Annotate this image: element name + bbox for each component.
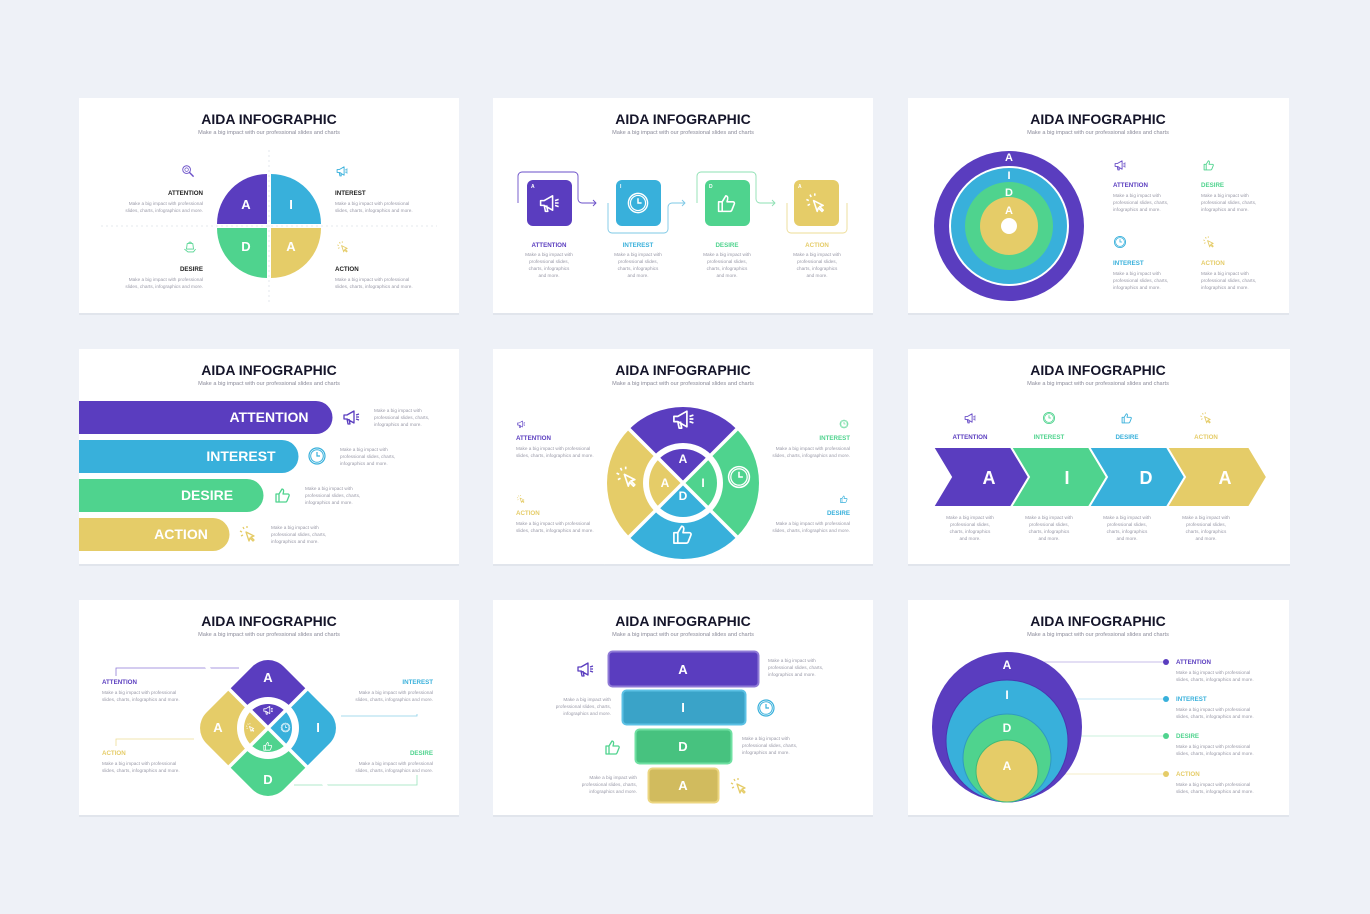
- step: interest: professional slides,: [618, 259, 658, 264]
- icon: desire: [184, 242, 196, 252]
- frames and arrows: [518, 172, 847, 233]
- label: interest: [355, 679, 433, 702]
- circle chart: I: [701, 476, 705, 490]
- bar: D desire: [606, 730, 797, 764]
- chevron: action: [1167, 412, 1267, 541]
- bar: action: professional slides, charts,: [271, 532, 326, 537]
- bar: D desire: D: [678, 739, 688, 754]
- chevron: interest: charts, infographics: [1029, 529, 1070, 534]
- label: interest: slides, charts, infographics and more.: [335, 208, 413, 213]
- label: action: [1201, 236, 1256, 290]
- label: desire: [355, 750, 433, 773]
- label: desire: infographics and more.: [1201, 207, 1249, 212]
- step: desire: Make a big impact with: [703, 252, 751, 257]
- label: desire: DESIRE: [1176, 733, 1199, 740]
- bar: A action: professional slides, charts,: [582, 782, 637, 787]
- label: action: slides, charts, infographics and more.: [516, 528, 594, 533]
- label: interest: Make a big impact with professional: [359, 690, 433, 695]
- circle chart: [607, 407, 759, 559]
- subtitle: Make a big impact with our professional slides and charts: [198, 632, 340, 638]
- label: desire: slides, charts, infographics and more.: [125, 284, 203, 289]
- bar: I interest: Make a big impact with: [563, 697, 611, 702]
- label: desire: professional slides, charts,: [1201, 200, 1256, 205]
- label: attention: [102, 679, 180, 702]
- chevron: action: professional slides,: [1186, 522, 1226, 527]
- step: attention: Make a big impact with: [525, 252, 573, 257]
- chevron: action: Make a big impact with: [1182, 515, 1230, 520]
- chevron: action: and more.: [1195, 536, 1217, 541]
- step: interest: INTEREST: [623, 242, 654, 249]
- label: interest: Make a big impact with: [1113, 271, 1161, 276]
- target chart: A: [1005, 205, 1013, 217]
- chevron: desire: D: [1140, 468, 1152, 488]
- target chart: [934, 151, 1084, 301]
- title: AIDA INFOGRAPHIC: [615, 613, 751, 629]
- label: interest: [1113, 236, 1168, 290]
- slide 9: nested circles: [908, 600, 1289, 817]
- chevron: attention: and more.: [959, 536, 981, 541]
- slide 1: quadrant circle: [79, 98, 459, 315]
- label: attention: [516, 421, 594, 458]
- label: attention: slides, charts, infographics and more.: [102, 697, 180, 702]
- label: interest: slides, charts, infographics and more.: [355, 697, 433, 702]
- label: desire: Make a big impact with professional: [1176, 744, 1250, 749]
- chevron: desire: Make a big impact with: [1103, 515, 1151, 520]
- label: action: Make a big impact with professional: [516, 521, 590, 526]
- diamond chart: A: [263, 670, 273, 685]
- label: desire: slides, charts, infographics and more.: [355, 768, 433, 773]
- bar: I interest: professional slides, charts,: [556, 704, 611, 709]
- title: AIDA INFOGRAPHIC: [1030, 613, 1166, 629]
- nested circle chart: D: [1003, 721, 1012, 735]
- label: desire: DESIRE: [827, 510, 850, 517]
- step: desire: and more.: [716, 273, 738, 278]
- bar: A attention: infographics and more.: [768, 672, 816, 677]
- label: desire: DESIRE: [180, 266, 203, 273]
- label: interest: [772, 420, 850, 458]
- bar: A attention: [578, 652, 823, 686]
- bar: desire: [79, 479, 360, 512]
- label: action: ACTION: [1201, 260, 1225, 267]
- label: attention: Make a big impact with professional: [102, 690, 176, 695]
- quadrant chart: I: [289, 197, 293, 212]
- label: desire: slides, charts, infographics and more.: [1176, 751, 1254, 756]
- slide 3: concentric target: [908, 98, 1289, 315]
- label: interest: INTEREST: [402, 679, 433, 686]
- chevron: desire: and more.: [1116, 536, 1138, 541]
- circle chart: D: [679, 489, 688, 503]
- bar: desire: professional slides, charts,: [305, 493, 360, 498]
- label: action: slides, charts, infographics and more.: [102, 768, 180, 773]
- bar: attention: professional slides, charts,: [374, 415, 429, 420]
- label: action: professional slides, charts,: [1201, 278, 1256, 283]
- label: desire: [772, 496, 850, 533]
- chevron: interest: Make a big impact with: [1025, 515, 1073, 520]
- step: interest: [614, 180, 662, 278]
- label: action: [335, 266, 413, 289]
- title: AIDA INFOGRAPHIC: [1030, 362, 1166, 378]
- step: action: and more.: [806, 273, 828, 278]
- label: action: ACTION: [1176, 771, 1200, 778]
- label: attention: ATTENTION: [516, 435, 551, 442]
- bar: action: ACTION: [154, 526, 208, 542]
- label: action: [1163, 771, 1254, 794]
- chevron: attention: [933, 414, 1029, 541]
- subtitle: Make a big impact with our professional slides and charts: [1027, 381, 1169, 387]
- slide 2: process squares: [493, 98, 873, 315]
- label: attention: ATTENTION: [102, 679, 137, 686]
- label: interest: Make a big impact with professional: [776, 446, 850, 451]
- bar: interest: professional slides, charts,: [340, 454, 395, 459]
- label: action: ACTION: [335, 266, 359, 273]
- quadrant chart: A: [241, 197, 251, 212]
- diamond chart: I: [316, 720, 320, 735]
- label: action: ACTION: [102, 750, 126, 757]
- step: desire: charts, infographics: [707, 266, 748, 271]
- step: action: Make a big impact with: [793, 252, 841, 257]
- bar: I interest: infographics and more.: [563, 711, 611, 716]
- chevron: attention: Make a big impact with: [946, 515, 994, 520]
- bar: interest: Make a big impact with: [340, 447, 388, 452]
- subtitle: Make a big impact with our professional slides and charts: [1027, 632, 1169, 638]
- chevron: desire: DESIRE: [1115, 434, 1139, 441]
- label: attention: Make a big impact with: [1113, 193, 1161, 198]
- slide 6: chevrons: [908, 349, 1290, 566]
- label: desire: DESIRE: [1201, 182, 1224, 189]
- bar: desire: Make a big impact with: [305, 486, 353, 491]
- chevron: action: A: [1218, 468, 1232, 488]
- leader lines: [1028, 662, 1165, 774]
- bar: D desire: Make a big impact with: [742, 736, 790, 741]
- slide 4: horizontal bars: [79, 349, 459, 566]
- step: action: charts, infographics: [797, 266, 838, 271]
- label: interest: Make a big impact with professional: [1176, 707, 1250, 712]
- quadrant chart: D: [241, 239, 251, 254]
- chevron: interest: professional slides,: [1029, 522, 1069, 527]
- bar: A action: [582, 768, 745, 802]
- quadrant chart: A: [286, 239, 296, 254]
- chevron: interest: I: [1064, 468, 1070, 488]
- target chart: A: [1005, 152, 1013, 164]
- bar: interest: infographics and more.: [340, 461, 388, 466]
- step: desire: DESIRE: [715, 242, 739, 249]
- label: interest: INTEREST: [335, 190, 366, 197]
- chevron: attention: A: [982, 468, 996, 488]
- label: attention: ATTENTION: [1176, 659, 1211, 666]
- label: interest: INTEREST: [1176, 696, 1207, 703]
- label: attention: [1113, 161, 1168, 212]
- label: desire: [1201, 161, 1256, 212]
- step: action: professional slides,: [797, 259, 837, 264]
- diamond chart: A: [213, 720, 223, 735]
- bar: A action: A: [678, 778, 688, 793]
- bar: attention: Make a big impact with: [374, 408, 422, 413]
- label: interest: [1163, 696, 1254, 719]
- label: interest: [335, 190, 413, 213]
- step: desire: professional slides,: [707, 259, 747, 264]
- target chart: D: [1005, 187, 1013, 199]
- label: action: slides, charts, infographics and more.: [1176, 789, 1254, 794]
- label: attention: Make a big impact with professional: [516, 446, 590, 451]
- title: AIDA INFOGRAPHIC: [615, 111, 751, 127]
- circle chart: A: [679, 452, 688, 466]
- label: action: infographics and more.: [1201, 285, 1249, 290]
- step: attention: professional slides,: [529, 259, 569, 264]
- slide 5: segmented circle: [493, 349, 873, 583]
- chevron: interest: INTEREST: [1034, 434, 1065, 441]
- step: attention: charts, infographics: [529, 266, 570, 271]
- step: attention: [525, 180, 573, 278]
- bar: interest: [79, 440, 395, 473]
- step: attention: ATTENTION: [532, 242, 567, 249]
- subtitle: Make a big impact with our professional slides and charts: [612, 632, 754, 638]
- bar: attention: [79, 401, 429, 434]
- step: action: A: [798, 184, 802, 190]
- quadrant chart: [217, 174, 321, 278]
- title: AIDA INFOGRAPHIC: [201, 362, 337, 378]
- subtitle: Make a big impact with our professional slides and charts: [198, 130, 340, 136]
- label: attention: ATTENTION: [1113, 182, 1148, 189]
- bar: desire: DESIRE: [181, 487, 233, 503]
- label: interest: INTEREST: [1113, 260, 1144, 267]
- label: attention: Make a big impact with professional: [129, 201, 203, 206]
- step: interest: charts, infographics: [618, 266, 659, 271]
- label: interest: slides, charts, infographics and more.: [772, 453, 850, 458]
- subtitle: Make a big impact with our professional slides and charts: [1027, 130, 1169, 136]
- bar: action: [79, 518, 326, 551]
- label: attention: infographics and more.: [1113, 207, 1161, 212]
- subtitle: Make a big impact with our professional slides and charts: [612, 130, 754, 136]
- title: AIDA INFOGRAPHIC: [201, 111, 337, 127]
- chevron: desire: charts, infographics: [1107, 529, 1148, 534]
- label: attention: slides, charts, infographics and more.: [1176, 677, 1254, 682]
- bar: A attention: A: [678, 662, 688, 677]
- circle chart: A: [661, 476, 670, 490]
- label: desire: [1163, 733, 1254, 756]
- bar: I interest: I: [681, 700, 685, 715]
- diamond chart: D: [263, 772, 273, 787]
- icon: interest: [337, 167, 348, 176]
- bar: action: infographics and more.: [271, 539, 319, 544]
- bar: A action: Make a big impact with: [589, 775, 637, 780]
- step: desire: D: [709, 184, 713, 190]
- label: interest: Make a big impact with professional: [335, 201, 409, 206]
- chevron: action: charts, infographics: [1186, 529, 1227, 534]
- subtitle: Make a big impact with our professional slides and charts: [612, 381, 754, 387]
- label: desire: Make a big impact with professional: [776, 521, 850, 526]
- step: attention: and more.: [538, 273, 560, 278]
- bar: I interest: [556, 690, 774, 724]
- chevron: attention: charts, infographics: [950, 529, 991, 534]
- nested circle chart: [932, 652, 1082, 802]
- label: action: Make a big impact with professional: [1176, 782, 1250, 787]
- label: interest: professional slides, charts,: [1113, 278, 1168, 283]
- step: desire: [703, 180, 751, 278]
- label: attention: ATTENTION: [168, 190, 204, 197]
- subtitle: Make a big impact with our professional slides and charts: [198, 381, 340, 387]
- step: attention: A: [531, 184, 535, 190]
- bar: D desire: professional slides, charts,: [742, 743, 797, 748]
- bar: attention: ATTENTION: [229, 409, 309, 425]
- bar: D desire: infographics and more.: [742, 750, 790, 755]
- step: interest: and more.: [627, 273, 649, 278]
- label: action: slides, charts, infographics and more.: [335, 284, 413, 289]
- target chart: I: [1007, 170, 1011, 182]
- chevron: attention: ATTENTION: [953, 434, 988, 441]
- step: interest: I: [620, 184, 622, 190]
- nested circle chart: I: [1005, 688, 1009, 702]
- label: attention: slides, charts, infographics and more.: [516, 453, 594, 458]
- nested circle chart: A: [1003, 658, 1012, 672]
- connector lines: [116, 668, 417, 785]
- title: AIDA INFOGRAPHIC: [201, 613, 337, 629]
- label: desire: Make a big impact with: [1201, 193, 1249, 198]
- label: attention: [1163, 659, 1254, 682]
- chevron: interest: and more.: [1038, 536, 1060, 541]
- chevron: interest: [1011, 412, 1107, 541]
- bar: A action: infographics and more.: [589, 789, 637, 794]
- bar: action: Make a big impact with: [271, 525, 319, 530]
- bar: desire: infographics and more.: [305, 500, 353, 505]
- label: attention: professional slides, charts,: [1113, 200, 1168, 205]
- label: action: Make a big impact with: [1201, 271, 1249, 276]
- icon: attention: [183, 166, 194, 177]
- label: interest: infographics and more.: [1113, 285, 1161, 290]
- label: attention: Make a big impact with professional: [1176, 670, 1250, 675]
- chevron: desire: professional slides,: [1107, 522, 1147, 527]
- label: action: Make a big impact with professional: [335, 277, 409, 282]
- label: desire: [125, 266, 203, 289]
- bar: A attention: professional slides, charts,: [768, 665, 823, 670]
- label: desire: slides, charts, infographics and more.: [772, 528, 850, 533]
- step: action: [793, 180, 841, 278]
- slide 7: rounded diamond: [79, 600, 459, 828]
- title: AIDA INFOGRAPHIC: [615, 362, 751, 378]
- nested circle chart: A: [1003, 759, 1012, 773]
- label: action: [102, 750, 180, 773]
- label: attention: slides, charts, infographics and more.: [125, 208, 203, 213]
- label: action: ACTION: [516, 510, 540, 517]
- label: desire: Make a big impact with professional: [359, 761, 433, 766]
- chevron: action: ACTION: [1194, 434, 1218, 441]
- label: action: [516, 495, 594, 533]
- label: desire: Make a big impact with professional: [129, 277, 203, 282]
- bar: A attention: Make a big impact with: [768, 658, 816, 663]
- label: interest: INTEREST: [819, 435, 850, 442]
- diamond chart: [200, 660, 336, 796]
- label: interest: slides, charts, infographics and more.: [1176, 714, 1254, 719]
- step: interest: Make a big impact with: [614, 252, 662, 257]
- label: attention: [125, 190, 204, 213]
- step: action: ACTION: [805, 242, 829, 249]
- label: action: Make a big impact with professional: [102, 761, 176, 766]
- label: desire: DESIRE: [410, 750, 433, 757]
- bar: interest: INTEREST: [206, 448, 276, 464]
- bar: attention: infographics and more.: [374, 422, 422, 427]
- chevron: desire: [1089, 414, 1185, 541]
- slide 8: funnel bars: [493, 600, 873, 817]
- icon: action: [337, 241, 347, 252]
- title: AIDA INFOGRAPHIC: [1030, 111, 1166, 127]
- chevron: attention: professional slides,: [950, 522, 990, 527]
